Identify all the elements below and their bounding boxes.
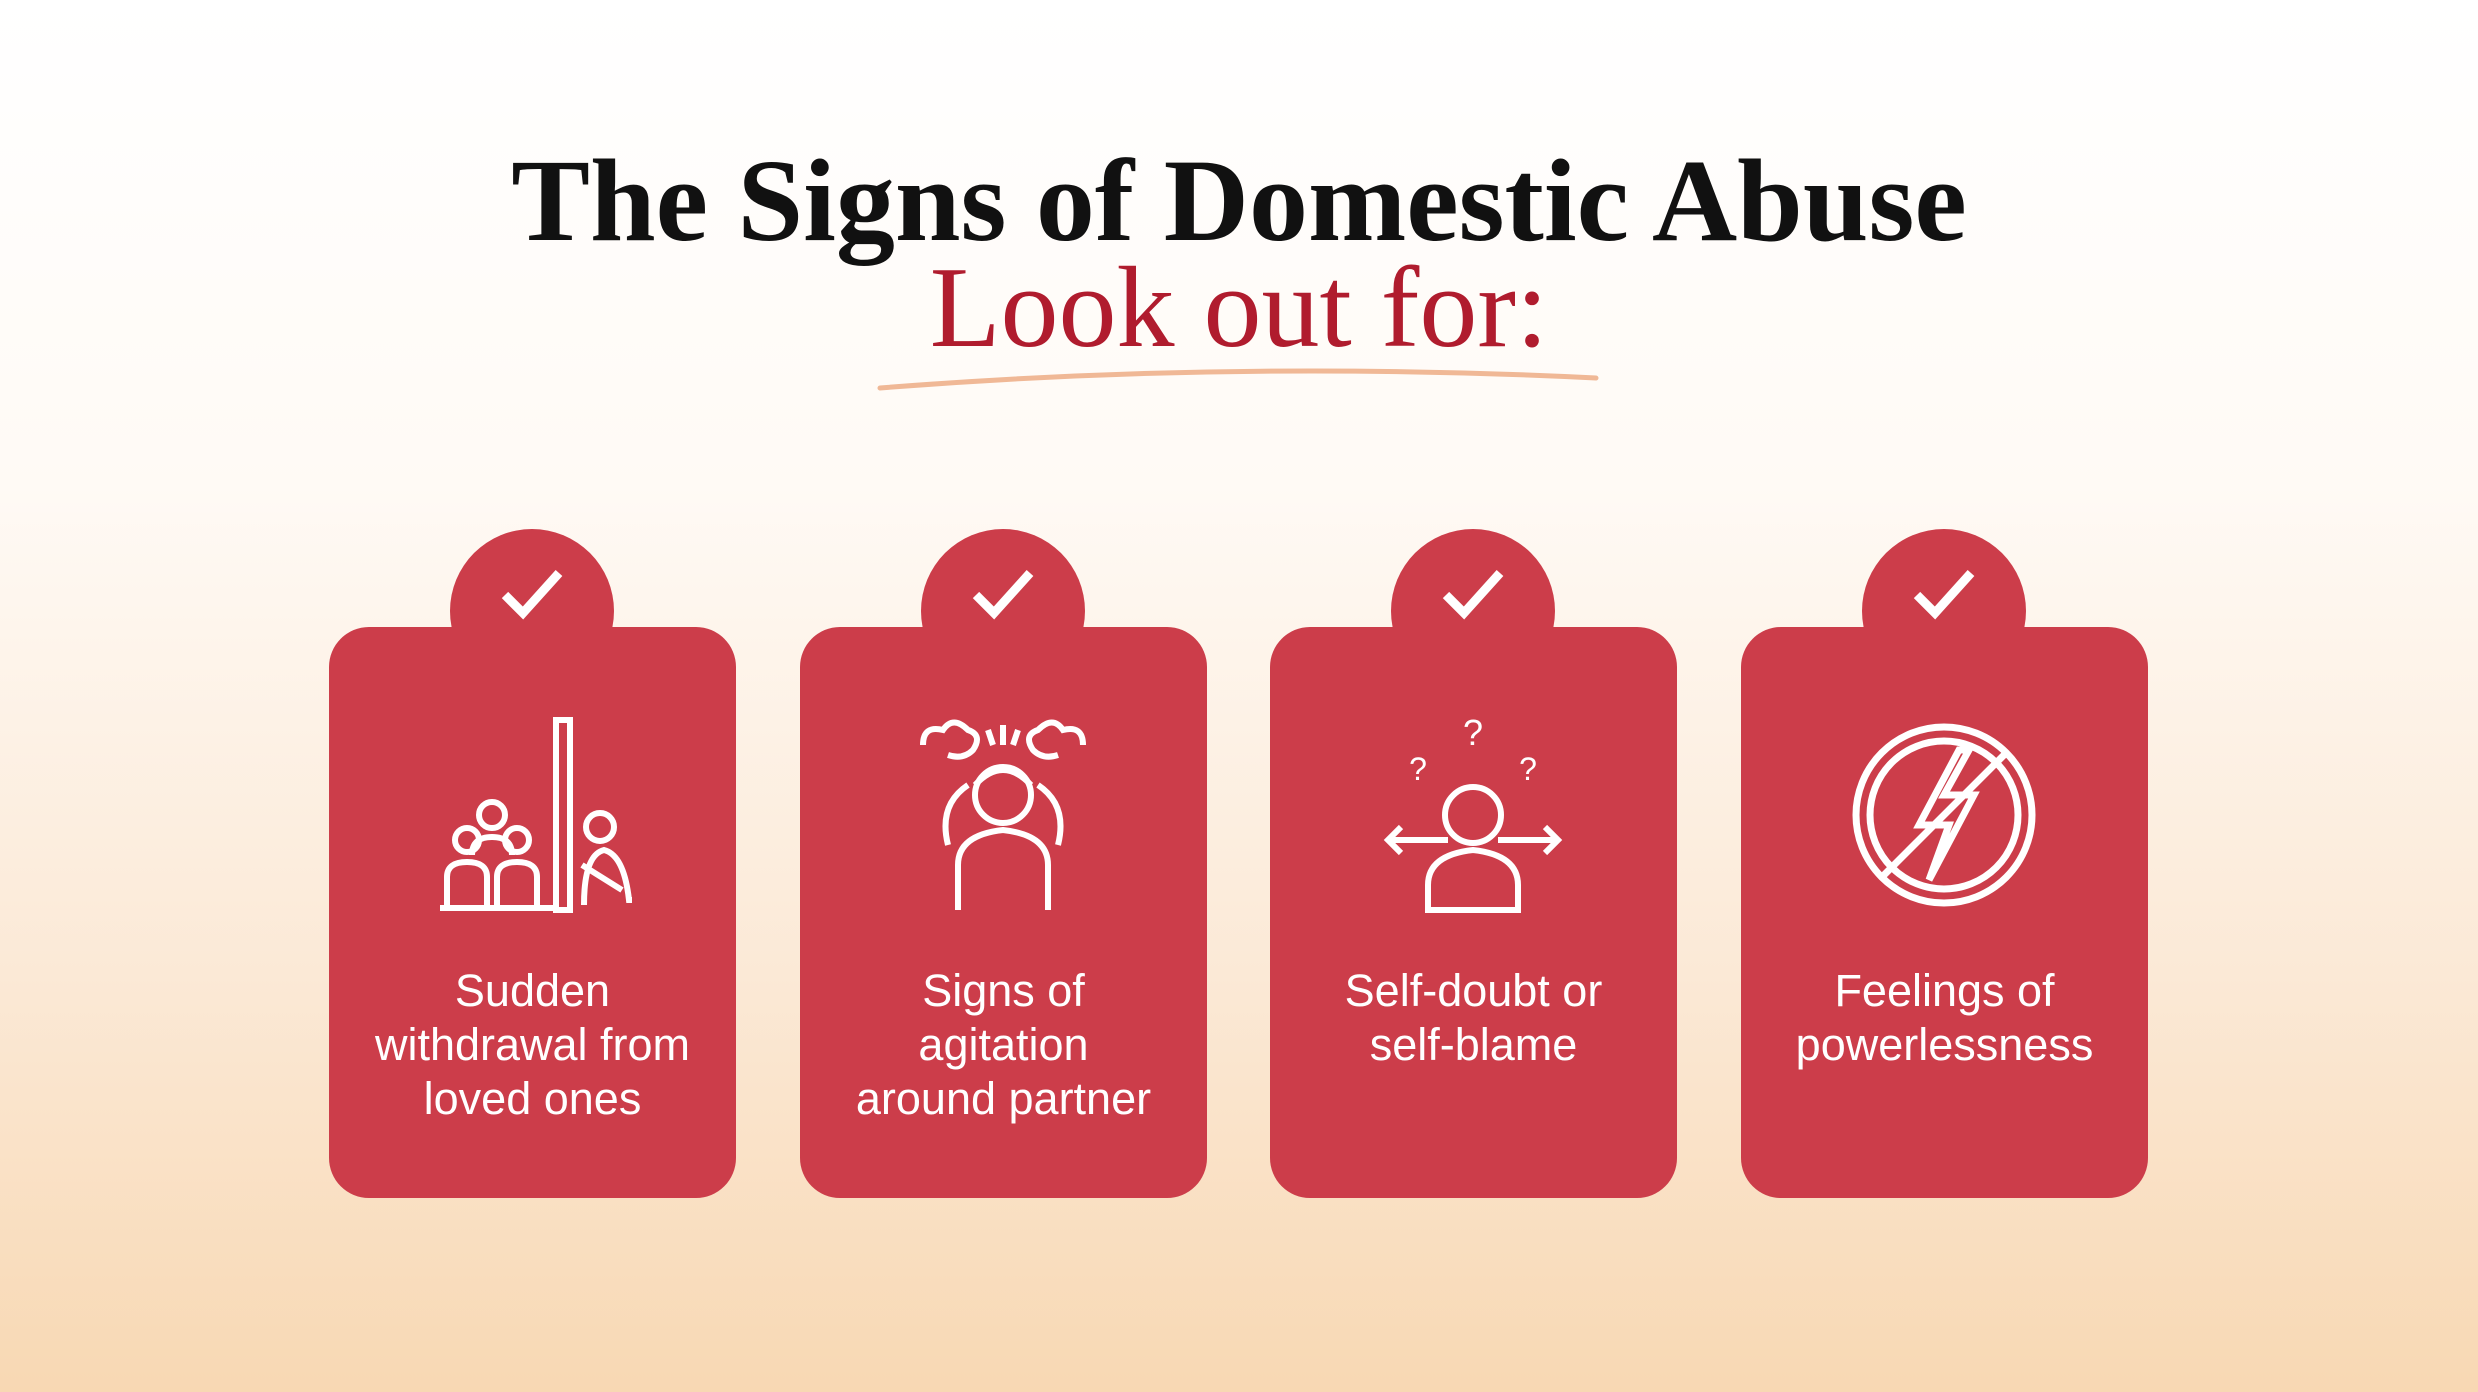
icon: self-doubt: ?	[1519, 751, 1537, 787]
text	[1796, 965, 2093, 1070]
text	[374, 965, 690, 1124]
text: self-blame	[1370, 1019, 1577, 1070]
text	[856, 965, 1151, 1124]
title: The Signs of Domestic Abuse	[511, 135, 1967, 266]
text: Signs of	[922, 965, 1085, 1016]
text: agitation	[918, 1019, 1089, 1070]
icon: withdrawal	[440, 717, 632, 913]
icon: self-doubt	[1384, 715, 1562, 913]
text	[1345, 965, 1602, 1070]
text: Sudden	[455, 965, 610, 1016]
text: Self-doubt or	[1345, 965, 1602, 1016]
icon: self-doubt: ?	[1409, 751, 1427, 787]
text: around partner	[856, 1073, 1151, 1124]
card: agitation	[800, 529, 1207, 1198]
text: Feelings of	[1834, 965, 2055, 1016]
underline	[878, 368, 1598, 390]
text: loved ones	[424, 1073, 641, 1124]
subtitle: Look out for:	[930, 244, 1548, 372]
card: self-doubt	[1270, 529, 1677, 1198]
card: powerlessness	[1741, 529, 2148, 1198]
text: withdrawal from	[375, 1019, 690, 1070]
text: powerlessness	[1796, 1019, 2093, 1070]
icon: agitation	[920, 720, 1086, 910]
icon: no power	[1852, 724, 2036, 906]
card: withdrawal	[329, 529, 736, 1198]
